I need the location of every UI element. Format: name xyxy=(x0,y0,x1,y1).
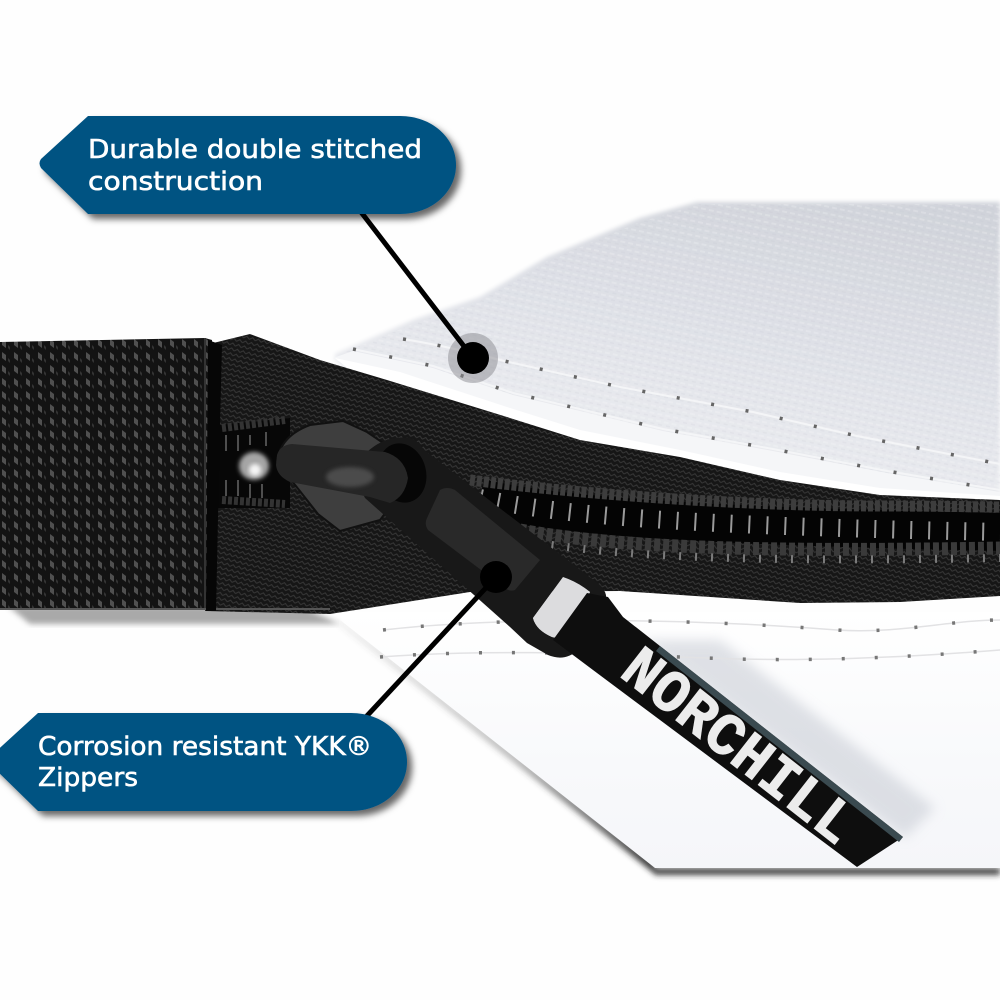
white folded edge xyxy=(333,351,1000,510)
lower knit cord xyxy=(520,530,1000,549)
pointer line: zipper xyxy=(365,561,512,718)
tag shadow on vinyl xyxy=(640,640,935,838)
pull ring opening xyxy=(371,438,433,508)
callout text: Zippers xyxy=(38,763,138,793)
upper knit cord xyxy=(470,480,1000,507)
webbing strap xyxy=(0,338,330,611)
callout: stitching xyxy=(40,116,456,214)
callout text: construction xyxy=(88,167,263,197)
strap shadow xyxy=(8,606,340,624)
zipper teeth xyxy=(470,480,1000,559)
zipper puller xyxy=(276,438,606,658)
zipper tape xyxy=(205,334,1000,614)
raised plate xyxy=(426,488,540,591)
callout text: Durable double stitched xyxy=(88,135,422,165)
panel: white bag lower xyxy=(330,612,1000,868)
pointer line: stitching xyxy=(361,212,498,383)
view through puller hole xyxy=(533,577,590,638)
bag shadow xyxy=(340,618,1000,875)
callout text: Corrosion resistant YKK® xyxy=(38,732,372,762)
zipper teeth at left end xyxy=(218,418,290,508)
panel: white bag upper xyxy=(333,202,1000,510)
slider bridge xyxy=(276,444,408,503)
callout: zippers xyxy=(0,713,407,811)
brand text: NORCHILL xyxy=(606,636,867,861)
fabric pull tag xyxy=(553,593,903,867)
stitching: upper seam xyxy=(353,339,1000,490)
coil channel xyxy=(480,498,1000,532)
zipper slider xyxy=(277,421,420,531)
stitching: lower seam xyxy=(380,620,1000,660)
